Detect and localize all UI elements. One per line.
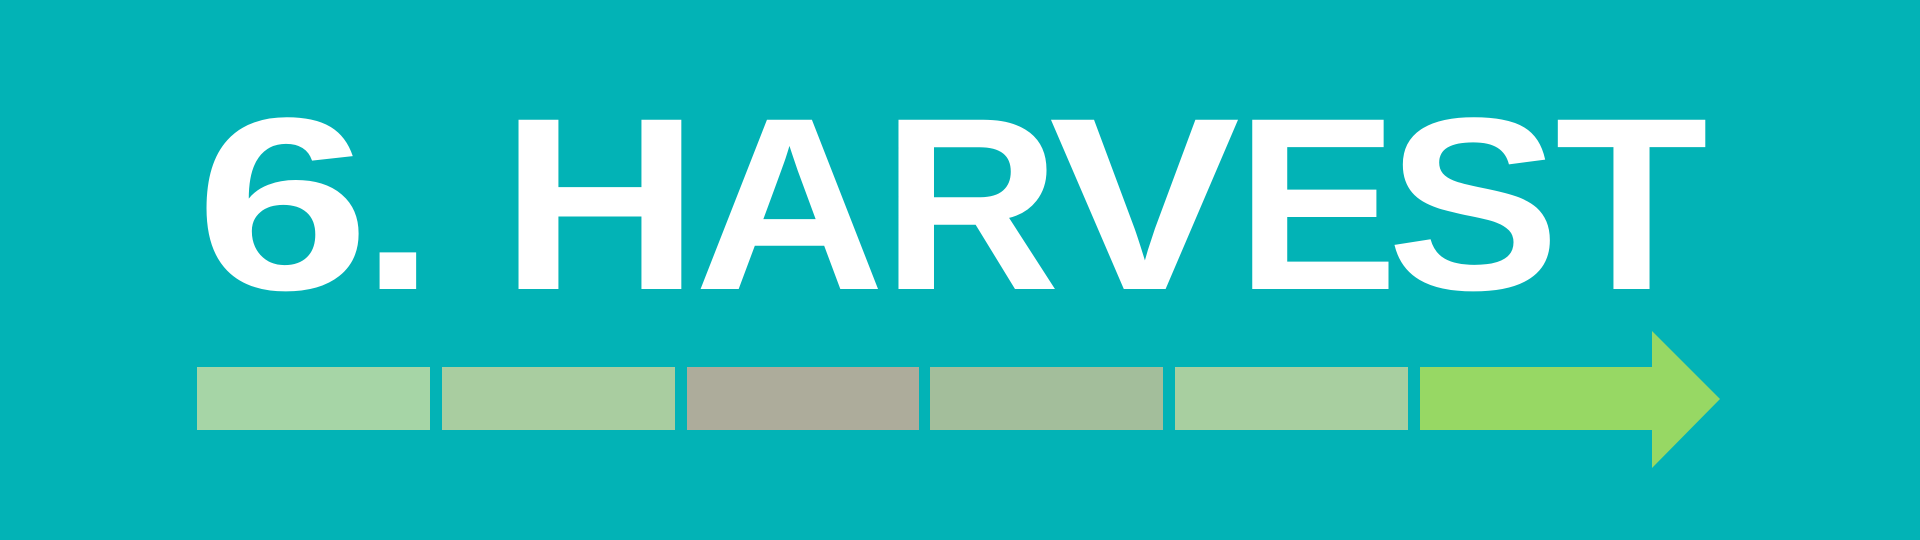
arrow: final segment <box>1420 331 1720 468</box>
title word: A <box>694 67 885 342</box>
progress bar <box>197 331 1720 468</box>
segment 4 <box>930 367 1163 430</box>
title number: . <box>362 67 434 342</box>
title word: V <box>1049 67 1240 342</box>
title word: T <box>1555 67 1708 342</box>
title number: 6 <box>195 67 370 342</box>
title <box>195 67 1708 342</box>
title number <box>195 67 434 342</box>
segment 3 <box>687 367 919 430</box>
segment 5 <box>1175 367 1408 430</box>
title word: S <box>1387 67 1560 342</box>
title word <box>500 67 1708 342</box>
title word: R <box>882 67 1060 342</box>
title word: H <box>500 67 700 342</box>
title word: E <box>1236 67 1398 342</box>
segment 2 <box>442 367 675 430</box>
segment 1 <box>197 367 430 430</box>
